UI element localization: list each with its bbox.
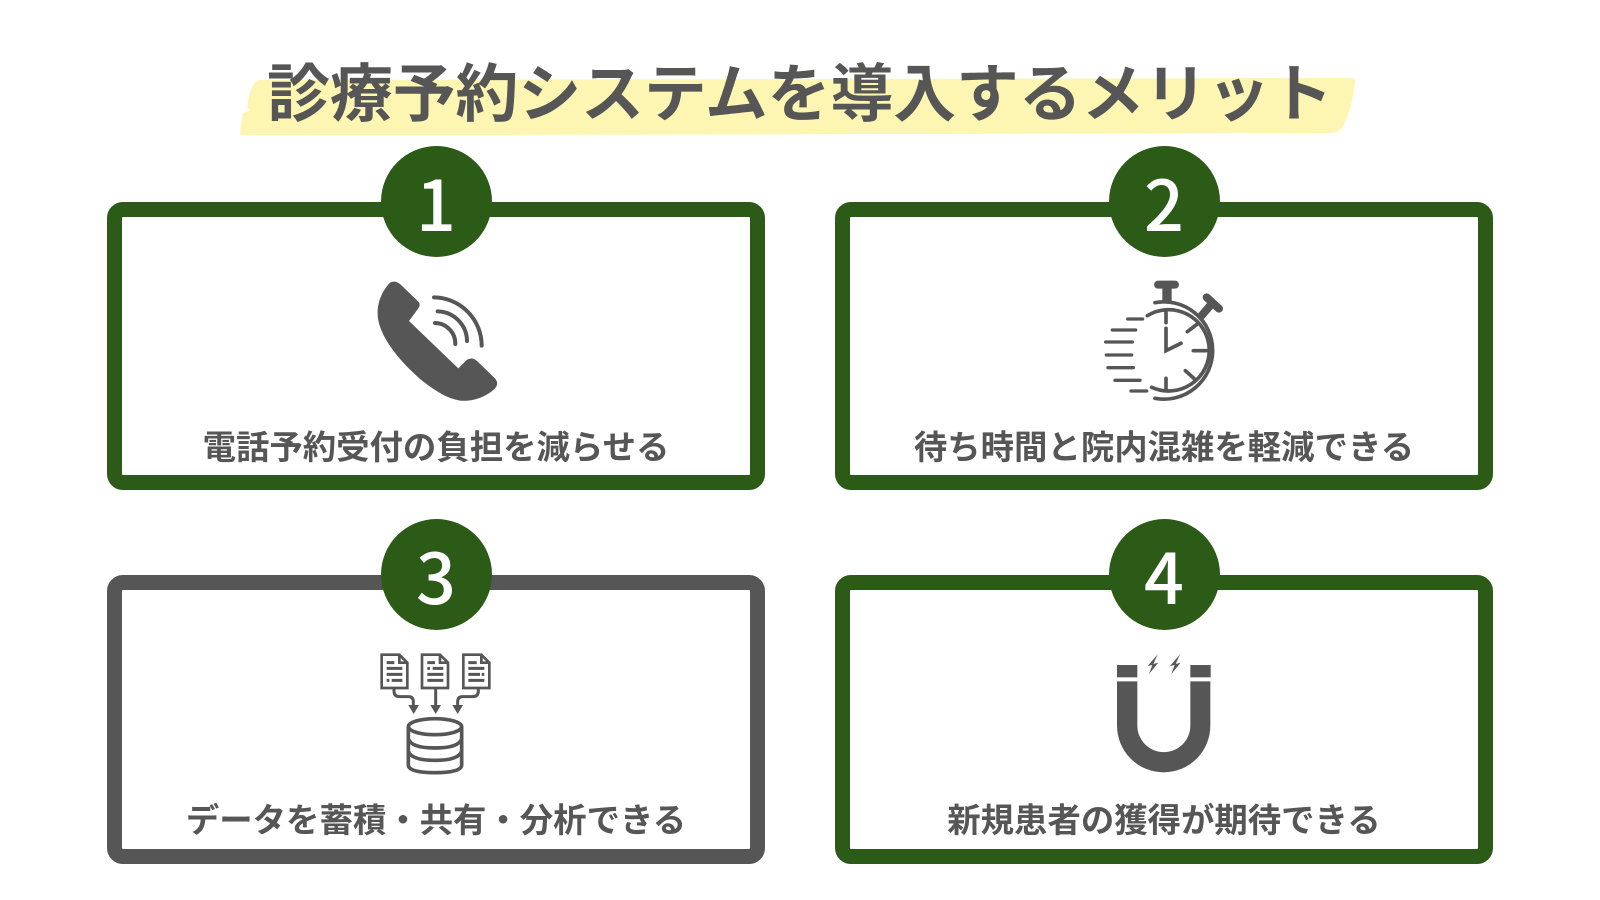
icon: documents into database bbox=[380, 653, 491, 774]
label 4: 新規患者の獲得が期待できる bbox=[947, 793, 1381, 842]
number badge 2 bbox=[1108, 146, 1220, 256]
number badge 4: 4 bbox=[1144, 524, 1184, 624]
label 2: 待ち時間と院内混雑を軽減できる bbox=[914, 420, 1414, 469]
number badge 3: 3 bbox=[416, 524, 456, 624]
panel: benefit 4 bbox=[835, 519, 1493, 864]
panel frame 4 bbox=[835, 575, 1493, 864]
panel frame 2 bbox=[835, 202, 1493, 490]
number badge 4 bbox=[1108, 518, 1220, 630]
number badge 1 bbox=[380, 146, 492, 256]
panel frame 3 bbox=[107, 575, 765, 864]
number badge 1: 1 bbox=[416, 150, 456, 252]
panel: benefit 3 bbox=[107, 519, 765, 864]
title highlight bbox=[240, 78, 1356, 135]
number badge 3 bbox=[380, 518, 492, 630]
number badge 2: 2 bbox=[1144, 150, 1184, 252]
panel frame 1 bbox=[107, 202, 765, 490]
label 3: データを蓄積・共有・分析できる bbox=[186, 793, 686, 842]
icon: stopwatch bbox=[1104, 280, 1223, 401]
label 1: 電話予約受付の負担を減らせる bbox=[203, 420, 669, 469]
title: 診療予約システムを導入するメリット bbox=[267, 44, 1333, 135]
panel: benefit 1 bbox=[107, 146, 765, 490]
icon: magnet bbox=[1117, 654, 1211, 772]
icon: telephone bbox=[378, 282, 498, 401]
panel: benefit 2 bbox=[835, 146, 1493, 490]
